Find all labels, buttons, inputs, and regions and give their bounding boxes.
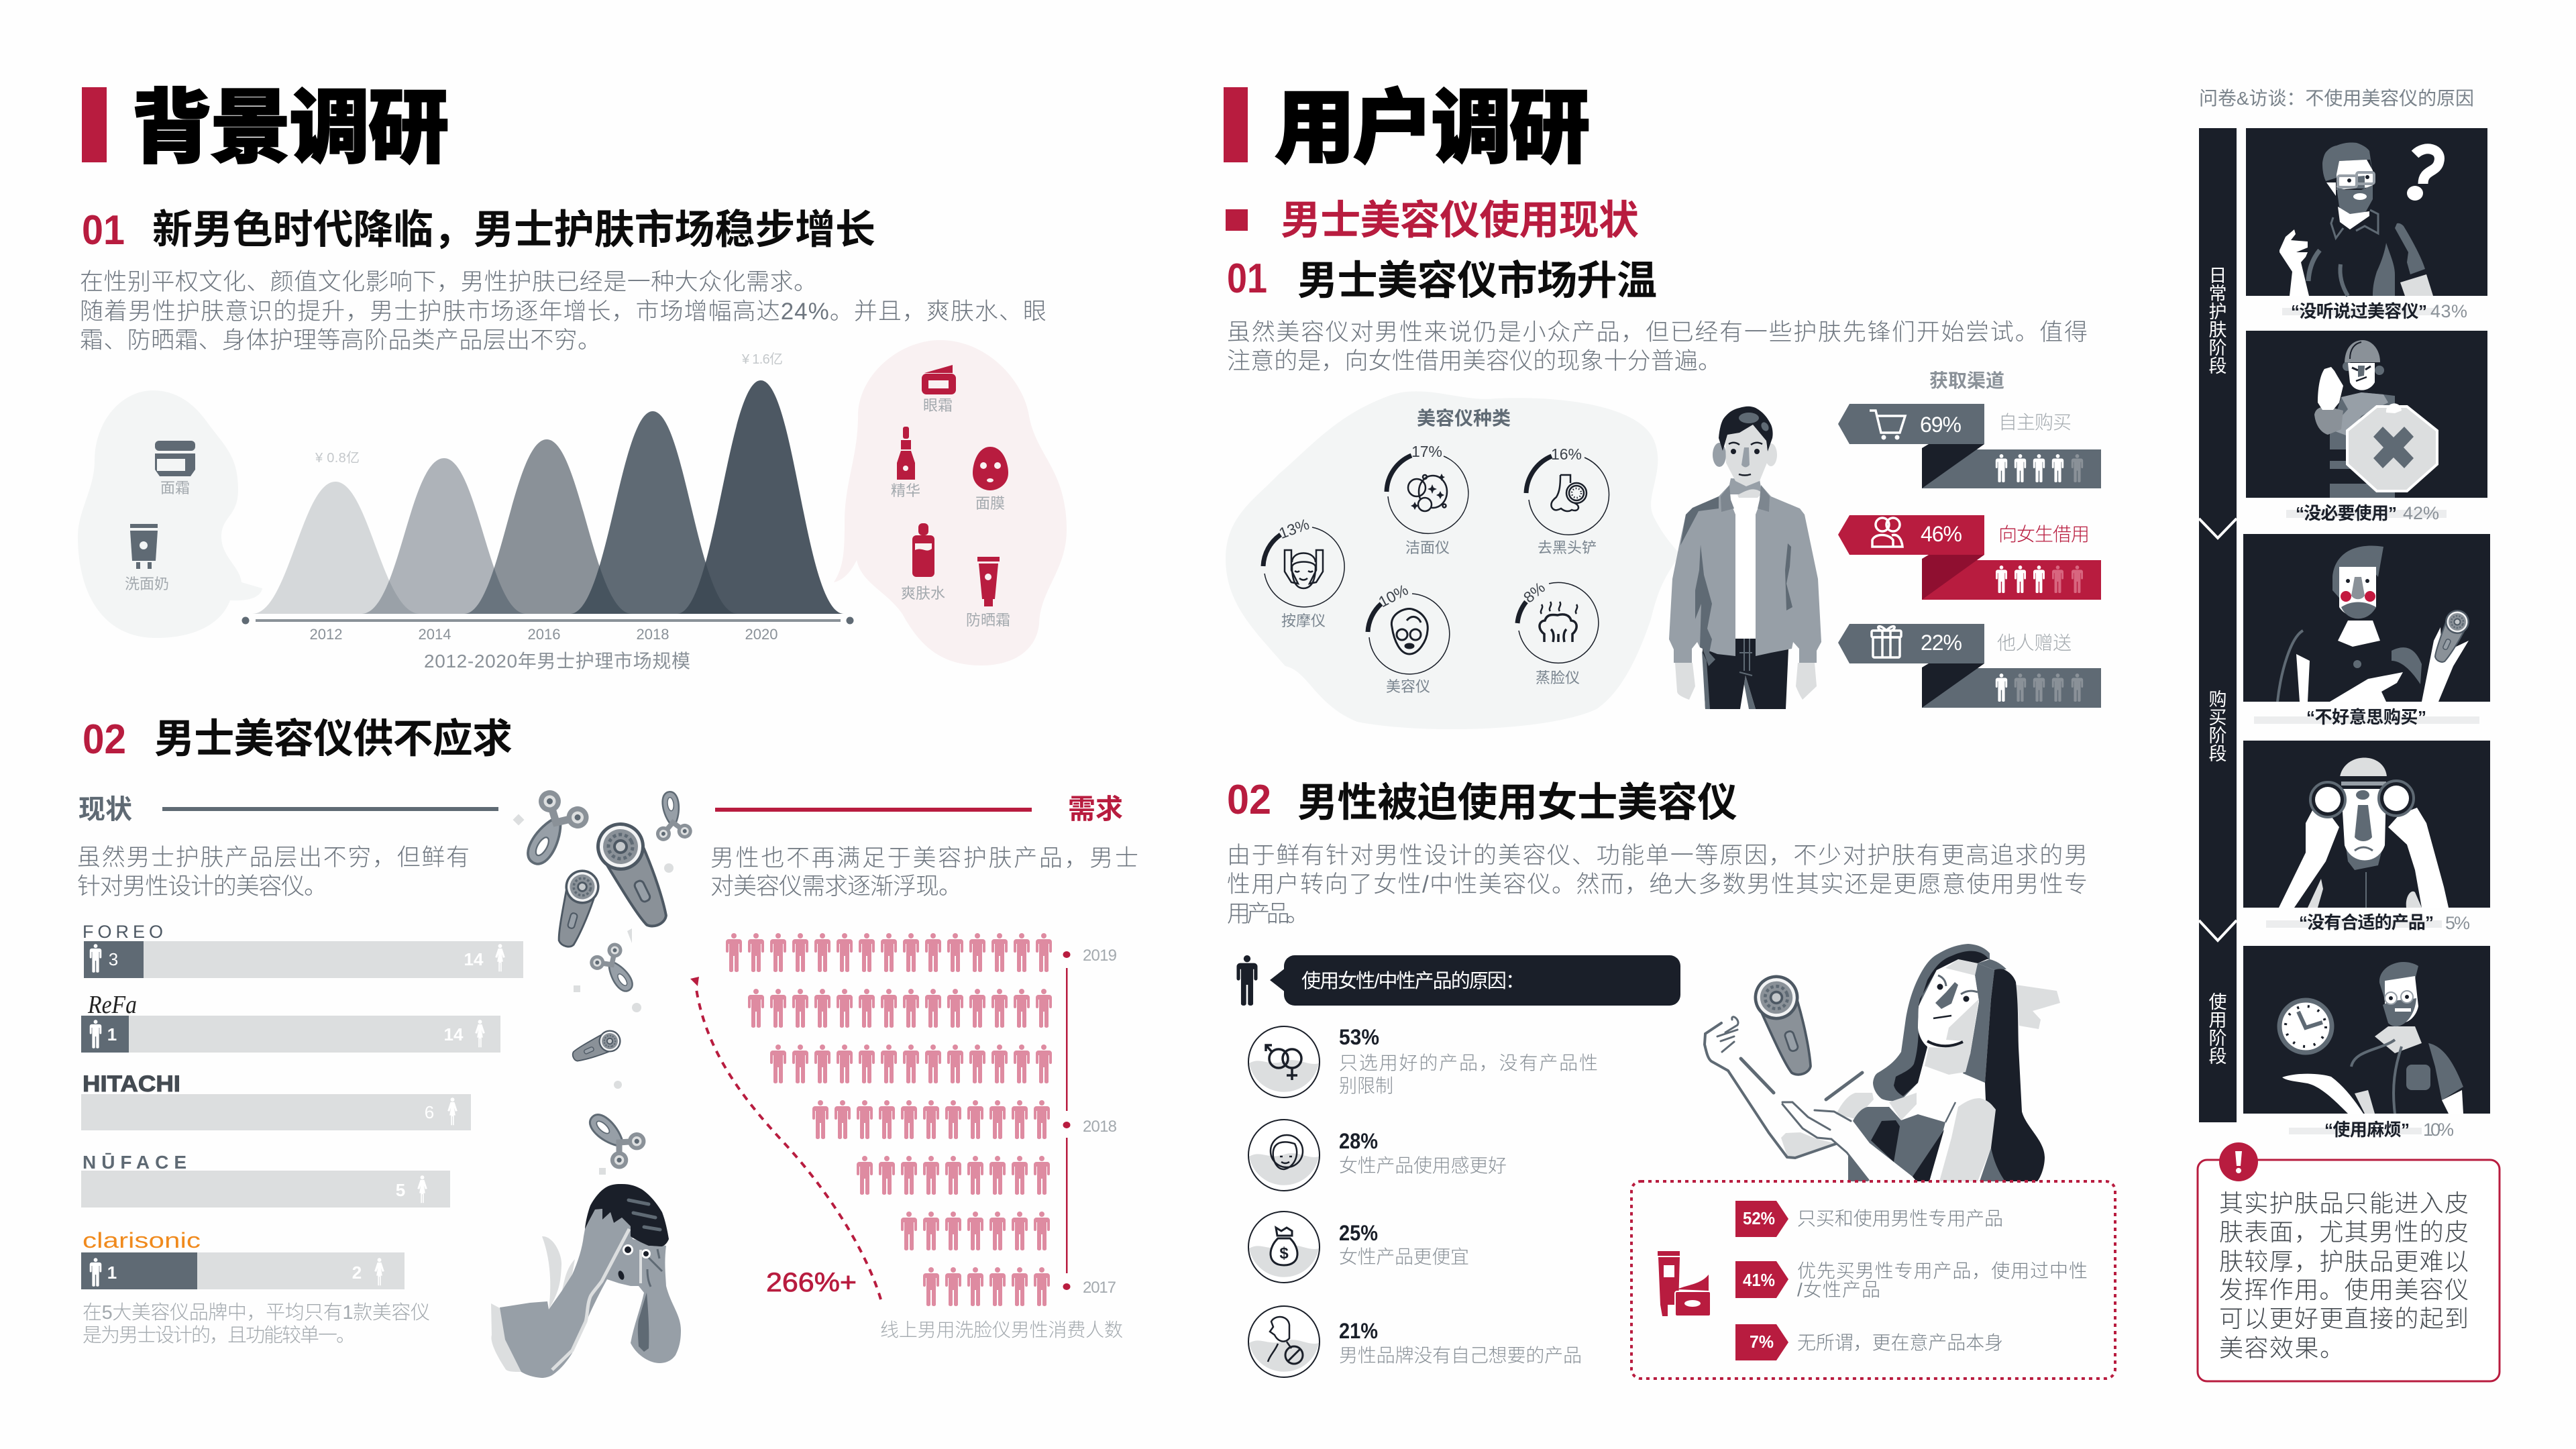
caption: embarrassed: “不好意思购买” <box>2306 707 2426 727</box>
tag: 他人赠送: 他人赠送 <box>1997 633 2072 653</box>
reason: 21%: 男性品牌没有自己想要的产品 <box>1339 1345 1582 1366</box>
bar: FOREO: 14 <box>464 949 484 969</box>
text block: market intro <box>80 269 1046 354</box>
timeline: years: 2019 <box>1083 947 1117 965</box>
tag: 自主购买: 自主购买 <box>1998 412 2072 433</box>
text block: current status: 针对男性设计的美容仪。 <box>77 873 327 900</box>
heading: user section 01: 男士美容仪市场升温 <box>1297 258 1657 303</box>
icon: cleanser tube <box>130 524 158 569</box>
panel: device types blob: 8% <box>1520 578 1548 606</box>
icon: exclamation <box>2219 1142 2258 1181</box>
stage column: 用 <box>2208 1010 2227 1030</box>
text block: note: 发挥作用。使用美容仪 <box>2219 1276 2469 1303</box>
panel: device types blob: 去黑头铲 <box>1538 539 1597 556</box>
tag: 自主购买 <box>1838 404 2101 488</box>
caption: troublesome: “使用麻烦” <box>2324 1120 2410 1140</box>
item: 52%: 52% <box>1743 1208 1775 1228</box>
callout: 266%: 266%+ <box>766 1268 857 1297</box>
caption: no suitable product <box>2266 912 2470 933</box>
reason: 25% <box>1248 1212 1469 1283</box>
stage column <box>2199 128 2237 1122</box>
icon: toner <box>912 523 934 577</box>
caption: never heard: 43% <box>2430 301 2467 321</box>
reason: 28%: 女性产品使用感更好 <box>1339 1155 1507 1176</box>
heading: 需求 <box>715 794 1123 824</box>
item: 按摩仪 <box>1263 527 1344 607</box>
stage column: 阶 <box>2208 1028 2227 1049</box>
heading: section 02: 男士美容仪供不应求 <box>154 716 513 761</box>
item: 7%: 无所谓，更在意产品本身 <box>1797 1332 2003 1353</box>
panel: never heard of it <box>2246 128 2487 296</box>
illustration: woman with device <box>1705 944 2060 1181</box>
text block: current status <box>77 845 470 900</box>
stage column: 段 <box>2208 1046 2227 1067</box>
panel: premium products blob <box>834 340 1067 665</box>
panel: mass products blob <box>78 390 262 638</box>
timeline: years: 2017 <box>1083 1279 1116 1297</box>
icon: eye cream <box>922 365 956 394</box>
caption: no need: 42% <box>2403 503 2439 523</box>
heading: section 01: 新男色时代降临，男士护肤市场稳步增长 <box>152 207 875 252</box>
label: 爽肤水: 爽肤水 <box>901 585 945 602</box>
reason: 53% <box>1248 1025 1598 1097</box>
heading: user section 02: 男性被迫使用女士美容仪 <box>1297 780 1737 825</box>
stage column: 阶 <box>2208 726 2227 746</box>
panel: device types blob: 17% <box>1411 443 1442 460</box>
label: 精华: 精华 <box>891 482 920 499</box>
caption: no need: “没必要使用” <box>2296 503 2397 523</box>
chart: market size 2012-2020: ¥ 1.6亿 <box>741 352 783 367</box>
caption: no need <box>2286 503 2447 523</box>
chart: market size 2012-2020: 2012 <box>310 626 342 643</box>
text block: note: 美容效果。 <box>2219 1334 2344 1362</box>
chart caption: consumers: 线上男用洗脸仪男性消费人数 <box>880 1320 1123 1340</box>
icon: serum bottle <box>897 427 915 480</box>
caption: no suitable product: 5% <box>2445 913 2470 933</box>
bar: NUFACE <box>81 1152 450 1208</box>
item: 41%: 41% <box>1743 1270 1775 1290</box>
illustration: falling devices <box>509 786 693 1175</box>
chart: consumer pictogram <box>725 933 1057 1306</box>
panel: device types blob: 16% <box>1551 445 1582 463</box>
chart: market size 2012-2020 <box>241 352 853 643</box>
label: 洗面奶: 洗面奶 <box>125 576 169 592</box>
reason: 53%: 53% <box>1339 1025 1379 1049</box>
heading: 获取渠道: 获取渠道 <box>1929 370 2004 391</box>
item: 去黑头铲 <box>1526 456 1609 535</box>
item: 41% <box>1735 1260 2088 1300</box>
reason: 21%: 21% <box>1339 1319 1378 1343</box>
text block: user intro: 虽然美容仪对男性来说仍是小众产品，但已经有一些护肤先锋们开始尝试。值得 <box>1227 319 2088 345</box>
tag: 向女生借用: 向女生借用 <box>1998 524 2090 545</box>
reason: 53%: 只选用好的产品，没有产品性 <box>1339 1053 1598 1073</box>
heading: section 01: 01 <box>82 207 125 254</box>
tag: 向女生借用: 46% <box>1921 522 1962 546</box>
label: 防晒霜: 防晒霜 <box>966 612 1010 629</box>
panel: device types blob <box>1226 391 1680 729</box>
item: 52%: 只买和使用男性专用产品 <box>1797 1208 2003 1229</box>
illustration: standing man <box>1669 407 1821 709</box>
panel: device types blob: 洁面仪 <box>1405 539 1450 556</box>
bar: FOREO: FOREO <box>83 922 163 942</box>
panel: device types blob: 10% <box>1376 581 1411 610</box>
bar: HITACHI: HITACHI <box>83 1071 180 1097</box>
bar: clarisonic: 2 <box>352 1263 362 1283</box>
bar: HITACHI: 6 <box>425 1102 434 1122</box>
text block: note: 其实护肤品只能进入皮 <box>2219 1189 2469 1217</box>
stage column: 阶 <box>2208 338 2227 358</box>
stage column: 肤 <box>2208 320 2227 340</box>
chart caption: 2012-2020年男士护理市场规模 <box>424 651 690 672</box>
stage column: 使 <box>2208 992 2227 1012</box>
bar: ReFa: 14 <box>444 1024 464 1044</box>
caption: troublesome <box>2289 1120 2454 1140</box>
stage column: 段 <box>2208 356 2227 376</box>
bar: NUFACE: NŪFACE <box>83 1152 186 1173</box>
stage column: 日 <box>2208 266 2227 286</box>
text block: market intro: 随着男性护肤意识的提升，男士护肤市场逐年增长，市场增幅高达24%。并且，爽肤水、眼 <box>80 299 1046 325</box>
icon: sunscreen <box>977 557 1000 606</box>
text block: user intro <box>1227 319 2088 374</box>
item: 蒸脸仪 <box>1517 582 1599 663</box>
label: 面霜: 面霜 <box>160 480 190 496</box>
caption: embarrassed <box>2254 707 2479 727</box>
illustration: frustrated man <box>491 1184 681 1378</box>
bar: FOREO: 3 <box>109 949 118 969</box>
text block: market intro: 在性别平权文化、颜值文化影响下，男性护肤已经是一种大众化需求。 <box>80 269 817 295</box>
item: 52% <box>1735 1201 2003 1237</box>
heading: section 02: 02 <box>83 716 126 763</box>
bar: ReFa: 1 <box>107 1024 117 1044</box>
item: 美容仪 <box>1368 594 1450 674</box>
text block: forced use: 由于鲜有针对男性设计的美容仪、功能单一等原因，不少对护肤有更高追求的男 <box>1227 843 2088 869</box>
panel: no suitable product <box>2243 741 2490 908</box>
chart: market size 2012-2020: 2014 <box>419 626 451 643</box>
heading: user section 02: 02 <box>1227 777 1271 823</box>
timeline: years <box>1063 947 1117 1297</box>
heading: 美容仪种类: 美容仪种类 <box>1417 408 1511 429</box>
reason: 25%: 25% <box>1339 1221 1378 1245</box>
reason: 28% <box>1248 1120 1507 1191</box>
item: 洁面仪 <box>1387 455 1468 533</box>
bar: ReFa <box>81 991 500 1053</box>
stage column: 常 <box>2208 284 2227 304</box>
heading: 现状: 现状 <box>78 795 132 824</box>
stage column: 购 <box>2208 690 2227 710</box>
chart: market size 2012-2020: 2020 <box>745 626 777 643</box>
text block: demand <box>710 845 1138 900</box>
heading: survey reasons: 问卷&访谈：不使用美容仪的原因 <box>2199 88 2474 109</box>
heading: 背景调研: 背景调研 <box>131 83 449 173</box>
text block: forced use: 用产品。 <box>1227 901 1309 927</box>
stage column: 段 <box>2208 744 2227 764</box>
text block: forced use <box>1227 843 2088 927</box>
text block: brand note <box>83 1301 430 1346</box>
text block: current status: 虽然男士护肤产品层出不穷，但鲜有 <box>77 845 470 871</box>
panel: device types blob: 按摩仪 <box>1281 612 1326 629</box>
panel: male-only preference <box>1631 1181 2115 1379</box>
bar: clarisonic <box>81 1228 405 1289</box>
chart: market size 2012-2020: 2016 <box>528 626 560 643</box>
chart: market size 2012-2020: ¥ 0.8亿 <box>315 450 360 466</box>
heading: 需求: 需求 <box>1068 794 1123 824</box>
callout: reasons header <box>1270 955 1680 1006</box>
callout: reasons header: 使用女性/中性产品的原因： <box>1301 970 1525 992</box>
icon: man <box>1236 955 1258 1006</box>
text block: demand: 男性也不再满足于美容护肤产品，男士 <box>710 845 1138 871</box>
text block: brand note: 在5大美容仪品牌中，平均只有1款美容仪 <box>83 1301 430 1324</box>
item: 7%: 7% <box>1750 1332 1774 1352</box>
chart: market size 2012-2020: 2018 <box>637 626 669 643</box>
stage column: 买 <box>2208 708 2227 728</box>
text block: note: 可以更好更直接的起到 <box>2219 1305 2469 1332</box>
text block: note: 肤表面，尤其男性的皮 <box>2219 1218 2469 1246</box>
bar: NUFACE: 5 <box>396 1180 405 1200</box>
text block: forced use: 性用户转向了女性/中性美容仪。然而，绝大多数男性其实还是更愿意使用男性专 <box>1227 871 2088 898</box>
bar: ReFa: ReFa <box>87 991 137 1019</box>
tag: 他人赠送 <box>1838 624 2101 708</box>
caption: troublesome: 10% <box>2423 1120 2454 1140</box>
reason: 25%: $ <box>1279 1244 1289 1263</box>
panel: no need <box>2246 331 2487 498</box>
text block: note <box>2219 1189 2469 1362</box>
timeline: years: 2018 <box>1083 1118 1117 1136</box>
panel: device types blob: 13% <box>1277 515 1311 542</box>
tag: 他人赠送: 22% <box>1921 631 1962 655</box>
text block: note: 肤较厚，护肤品更难以 <box>2219 1248 2469 1275</box>
label: 眼霜: 眼霜 <box>923 397 953 414</box>
panel: device types blob: 蒸脸仪 <box>1536 669 1580 686</box>
item: 7% <box>1735 1324 2003 1360</box>
text block: demand: 对美容仪需求逐渐浮现。 <box>710 873 962 900</box>
bar: clarisonic: clarisonic <box>83 1228 201 1252</box>
reason: 28%: 28% <box>1339 1129 1378 1153</box>
stage column: 护 <box>2208 302 2227 322</box>
label: 面膜: 面膜 <box>975 495 1005 512</box>
caption: no suitable product: “没有合适的产品” <box>2299 912 2434 932</box>
item: 41%: 优先买男性专用产品，使用过中性 <box>1797 1260 2088 1281</box>
text block: market intro: 霜、防晒霜、身体护理等高阶品类产品层出不穷。 <box>80 327 601 354</box>
panel: troublesome <box>2243 946 2490 1114</box>
heading: 现状 <box>78 795 498 824</box>
heading: 男士美容仪使用现状: 男士美容仪使用现状 <box>1281 198 1639 243</box>
icon: cream jar <box>155 441 195 476</box>
item: 41%: /女性产品 <box>1797 1279 1880 1300</box>
panel: embarrassed <box>2243 534 2490 702</box>
text block: brand note: 是为男士设计的，且功能较单一。 <box>83 1324 356 1346</box>
tag: 自主购买: 69% <box>1920 413 1962 437</box>
text block: user intro: 注意的是，向女性借用美容仪的现象十分普遍。 <box>1227 348 1721 374</box>
bar: clarisonic: 1 <box>107 1263 117 1283</box>
arrow: growth curve <box>690 977 881 1299</box>
tag: 向女生借用 <box>1838 515 2101 600</box>
icon: tube and jar <box>1658 1251 1711 1316</box>
icon: face mask <box>973 447 1008 490</box>
reason: 25%: 女性产品更便宜 <box>1339 1246 1469 1267</box>
panel: device types blob: 美容仪 <box>1386 678 1430 695</box>
reason: 21% <box>1248 1306 1582 1377</box>
reason: 53%: 别限制 <box>1339 1075 1393 1096</box>
heading: user section 01: 01 <box>1227 256 1267 302</box>
bar: HITACHI <box>81 1071 471 1130</box>
callout: expert note <box>2198 1142 2500 1381</box>
bar: FOREO <box>83 922 523 978</box>
caption: never heard: “没听说过美容仪” <box>2291 301 2427 321</box>
heading: 用户调研: 用户调研 <box>1275 83 1590 173</box>
